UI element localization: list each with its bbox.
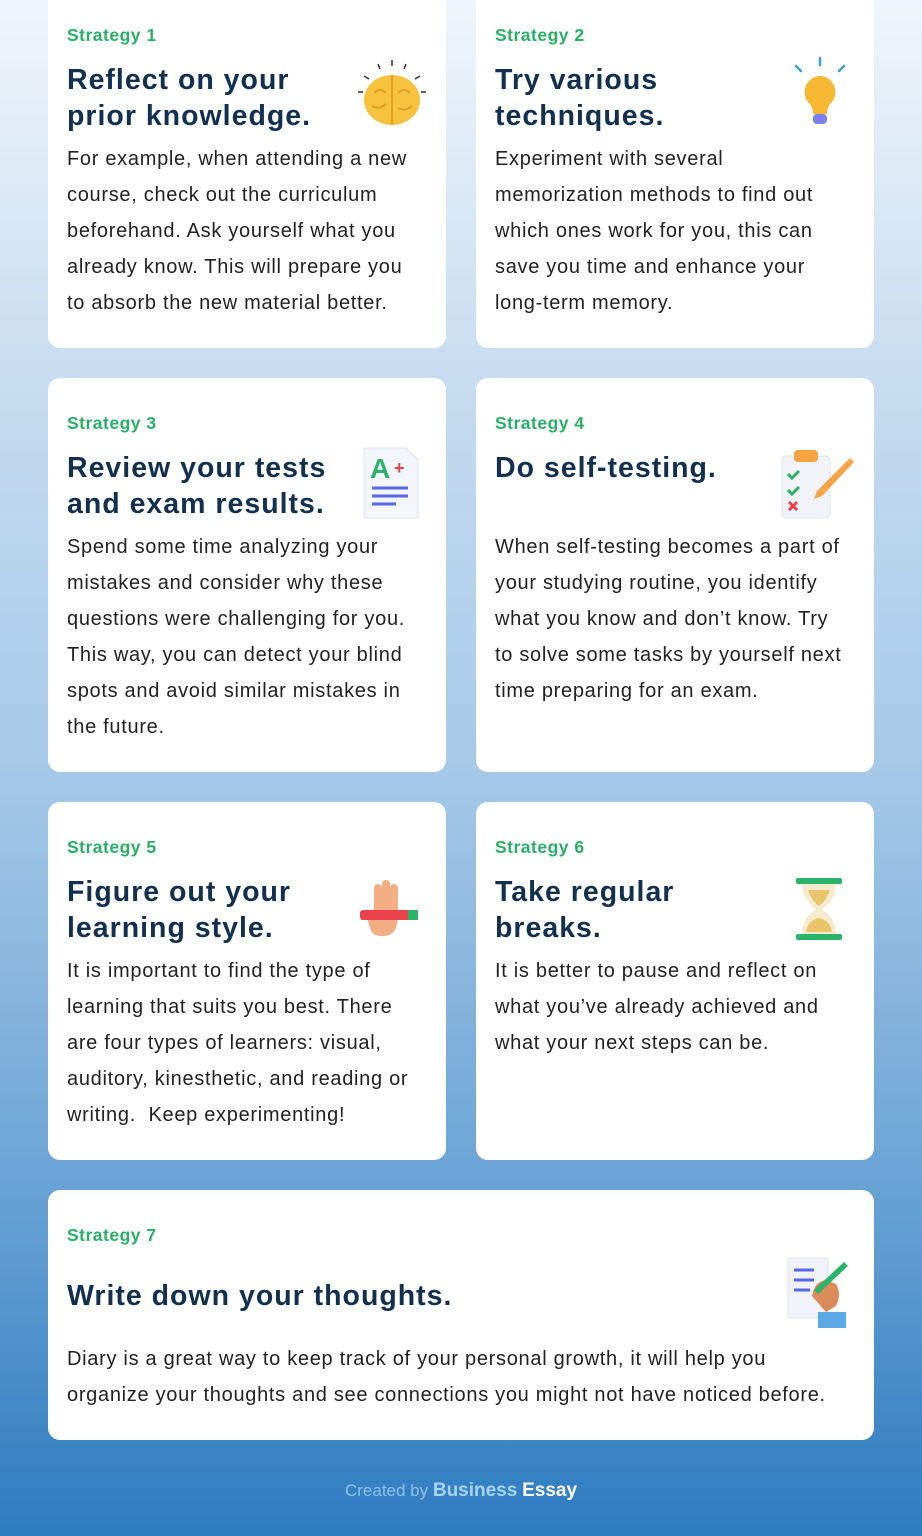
label: Strategy 5 <box>67 837 157 857</box>
body <box>67 148 407 314</box>
body: This way, you can detect your blind <box>67 644 402 666</box>
title: Write down your thoughts. <box>67 1280 452 1312</box>
body: writing. Keep experimenting! <box>67 1104 345 1126</box>
body: what you know and don’t know. Try <box>495 608 828 630</box>
body: spots and avoid similar mistakes in <box>67 680 401 702</box>
body: memorization methods to find out <box>495 184 813 206</box>
icon: brain <box>358 60 426 125</box>
body: what your next steps can be. <box>495 1032 769 1054</box>
body: Diary is a great way to keep track of your personal growth, it will help you <box>67 1348 766 1370</box>
body: to absorb the new material better. <box>67 292 388 314</box>
body <box>495 960 819 1054</box>
title: Review your tests <box>67 452 326 484</box>
body: are four types of learners: visual, <box>67 1032 382 1054</box>
card: strategy 1 <box>48 0 446 348</box>
body: already know. This will prepare you <box>67 256 402 278</box>
icon: light bulb <box>794 56 846 124</box>
title: prior knowledge. <box>67 100 311 132</box>
label: Strategy 1 <box>67 25 157 45</box>
body <box>67 536 405 738</box>
icon: graded paper: A <box>370 453 390 484</box>
title <box>67 452 326 520</box>
title: breaks. <box>495 912 602 944</box>
body <box>495 536 841 702</box>
body: It is important to find the type of <box>67 960 371 982</box>
card: strategy 4 <box>476 378 874 772</box>
body: which ones work for you, this can <box>495 220 813 242</box>
body: When self-testing becomes a part of <box>495 536 840 558</box>
body: long-term memory. <box>495 292 673 314</box>
body: your studying routine, you identify <box>495 572 817 594</box>
title: learning style. <box>67 912 274 944</box>
icon: graded paper: + <box>394 458 405 478</box>
body: the future. <box>67 716 165 738</box>
card: strategy 3 <box>48 378 446 772</box>
title: techniques. <box>495 100 664 132</box>
title: and exam results. <box>67 488 325 520</box>
card: strategy 7 <box>48 1190 874 1440</box>
body: Spend some time analyzing your <box>67 536 378 558</box>
body <box>67 1348 826 1406</box>
body: questions were challenging for you. <box>67 608 405 630</box>
body: Experiment with several <box>495 148 723 170</box>
body: For example, when attending a new <box>67 148 407 170</box>
title: Figure out your <box>67 876 291 908</box>
label: Strategy 7 <box>67 1225 157 1245</box>
footer credit: Created by Business Essay <box>345 1480 577 1501</box>
icon: checklist with pencil <box>782 450 854 518</box>
body: organize your thoughts and see connections you might not have noticed before. <box>67 1384 826 1406</box>
body <box>67 960 408 1126</box>
body: course, check out the curriculum <box>67 184 377 206</box>
icon: hand with pencil <box>360 880 418 936</box>
title <box>67 876 291 944</box>
body: what you’ve already achieved and <box>495 996 819 1018</box>
label: Strategy 4 <box>495 413 585 433</box>
title: Do self-testing. <box>495 452 717 484</box>
title: Try various <box>495 64 658 96</box>
title <box>67 64 311 132</box>
title: Reflect on your <box>67 64 289 96</box>
body: save you time and enhance your <box>495 256 805 278</box>
body: mistakes and consider why these <box>67 572 383 594</box>
body <box>495 148 813 314</box>
label: Strategy 6 <box>495 837 585 857</box>
label: Strategy 3 <box>67 413 157 433</box>
body: time preparing for an exam. <box>495 680 758 702</box>
body: to solve some tasks by yourself next <box>495 644 841 666</box>
card: strategy 6 <box>476 802 874 1160</box>
card: strategy 5 <box>48 802 446 1160</box>
title: Take regular <box>495 876 674 908</box>
card: strategy 2 <box>476 0 874 348</box>
body: beforehand. Ask yourself what you <box>67 220 396 242</box>
icon: graded paper <box>364 448 418 518</box>
body: It is better to pause and reflect on <box>495 960 817 982</box>
body: auditory, kinesthetic, and reading or <box>67 1068 408 1090</box>
body: learning that suits you best. There <box>67 996 392 1018</box>
title <box>495 876 674 944</box>
label: Strategy 2 <box>495 25 585 45</box>
icon: writing hand <box>788 1258 848 1328</box>
icon: hourglass <box>796 878 842 940</box>
title <box>495 64 664 132</box>
